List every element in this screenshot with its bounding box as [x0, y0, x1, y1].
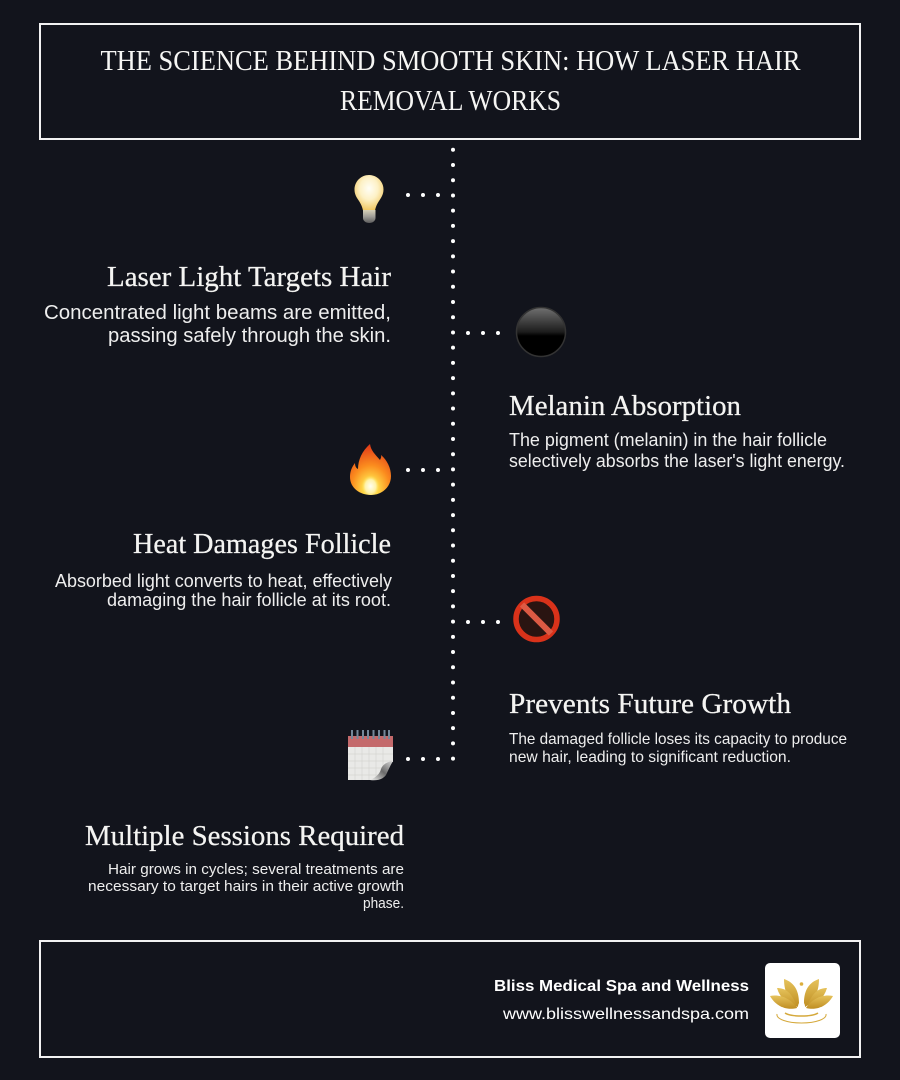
- heading: Heat Damages Follicle: [133, 528, 391, 560]
- step 3: heat: [55, 444, 392, 610]
- step 4: prevents growth: [509, 598, 847, 766]
- dotted timeline: [408, 150, 499, 762]
- title box: [40, 24, 860, 139]
- heading: Melanin Absorption: [509, 390, 741, 422]
- step 2: melanin: [509, 308, 845, 471]
- title: THE SCIENCE BEHIND SMOOTH SKIN: HOW LASER HAIR: [100, 46, 801, 77]
- website: www.blisswellnessandspa.com: [502, 1006, 749, 1023]
- description: passing safely through the skin.: [108, 325, 391, 347]
- heading: Laser Light Targets Hair: [107, 261, 391, 293]
- description: [509, 731, 847, 766]
- description: Concentrated light beams are emitted,: [44, 302, 391, 324]
- description: phase.: [363, 895, 404, 912]
- title: REMOVAL WORKS: [340, 86, 561, 117]
- icon: black circle: [516, 308, 566, 356]
- description: Hair grows in cycles; several treatments are: [108, 861, 404, 878]
- title: [100, 46, 801, 117]
- description: [55, 571, 392, 610]
- icon: light bulb: [354, 175, 384, 223]
- step 1: laser light: [44, 175, 391, 347]
- description: The pigment (melanin) in the hair follicle: [509, 430, 827, 450]
- description: new hair, leading to significant reduction.: [509, 749, 791, 766]
- description: [44, 302, 391, 347]
- description: selectively absorbs the laser's light energy.: [509, 451, 845, 471]
- step 5: multiple sessions: [85, 730, 404, 912]
- description: damaging the hair follicle at its root.: [107, 590, 391, 610]
- description: Absorbed light converts to heat, effectively: [55, 571, 392, 591]
- icon: prohibited sign: [516, 598, 557, 640]
- icon: fire: [350, 444, 391, 495]
- icon: calendar: [348, 730, 393, 780]
- footer box: [40, 941, 860, 1057]
- description: The damaged follicle loses its capacity to produce: [509, 731, 847, 748]
- business name: Bliss Medical Spa and Wellness: [494, 978, 749, 995]
- logo: [765, 963, 840, 1038]
- heading: Prevents Future Growth: [509, 688, 792, 720]
- description: [88, 861, 404, 912]
- description: [509, 430, 845, 471]
- description: necessary to target hairs in their active growth: [88, 878, 404, 895]
- heading: Multiple Sessions Required: [85, 820, 404, 852]
